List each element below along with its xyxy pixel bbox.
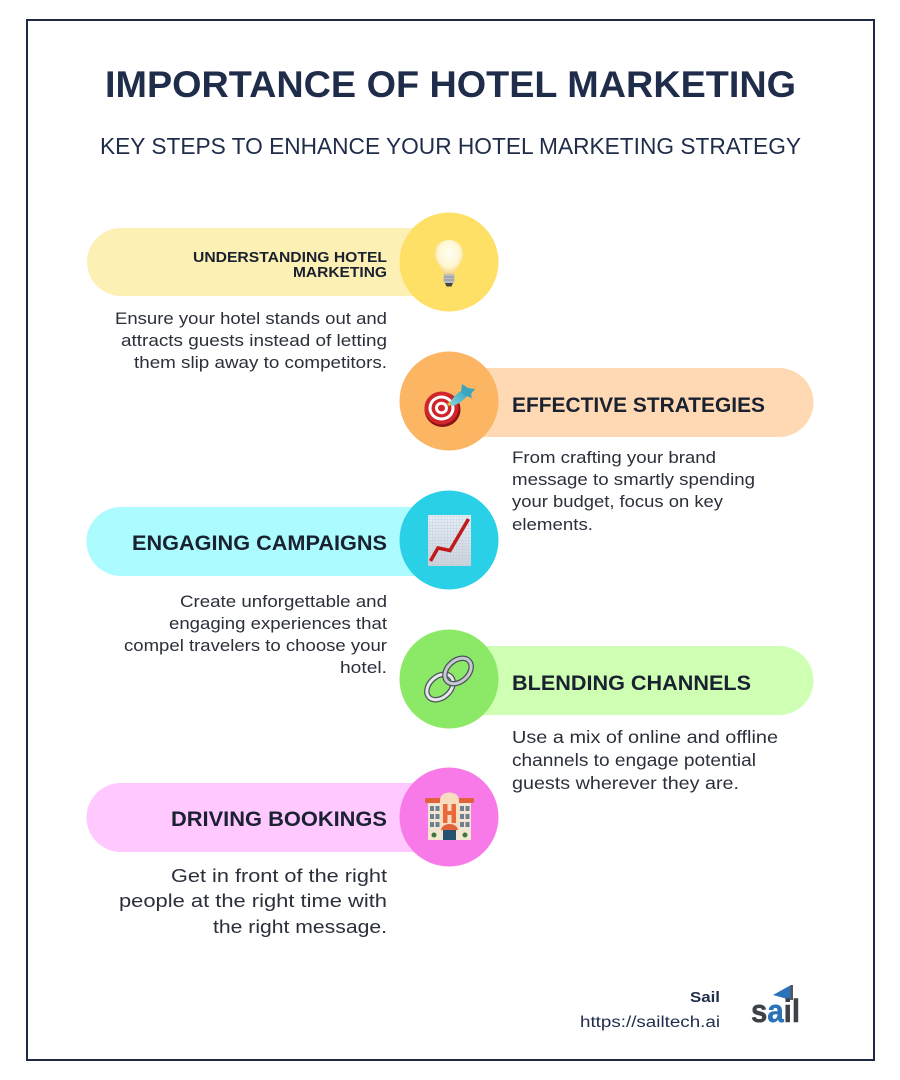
heading: step 4: BLENDING CHANNELS (512, 671, 751, 695)
text: step 5 body: the right message. (213, 916, 387, 937)
text: step 2 body: elements. (512, 516, 593, 534)
text: step 5 body: people at the right time with (119, 890, 387, 911)
panel: driving bookings (87, 768, 499, 937)
text: step 1 body: attracts guests instead of letting (121, 332, 387, 350)
circle: step 2 (400, 352, 498, 450)
text: step 2 body: message to smartly spending (512, 471, 755, 489)
pill: step 2 (460, 368, 814, 437)
footer: brand name and url: Sail (690, 990, 720, 1006)
icon: dart target (424, 384, 475, 427)
text: step 1 body: them slip away to competitors. (134, 354, 387, 372)
logo: sail: sail (751, 993, 800, 1029)
pill: step 5 (87, 783, 440, 852)
subtitle: KEY STEPS TO ENHANCE YOUR HOTEL MARKETING STRATEGY (100, 133, 801, 159)
text: step 5 body (119, 865, 387, 937)
title: IMPORTANCE OF HOTEL MARKETING (105, 64, 796, 105)
footer: brand name and url (580, 990, 720, 1031)
circle: step 5 (400, 768, 498, 866)
heading: step 1: MARKETING (293, 265, 387, 281)
circle: step 4 (400, 630, 498, 728)
heading: step 1 (193, 250, 387, 281)
circle: step 1 (400, 212, 498, 312)
text: step 3 body: hotel. (340, 659, 387, 677)
heading: step 5: DRIVING BOOKINGS (171, 807, 387, 831)
text: step 4 body: Use a mix of online and offline (512, 727, 778, 747)
footer: brand name and url: https://sailtech.ai (580, 1014, 720, 1031)
text: step 3 body: compel travelers to choose your (124, 637, 388, 655)
icon: chain links (422, 653, 476, 705)
panel: blending channels (400, 630, 814, 793)
text: step 5 body: Get in front of the right (171, 865, 387, 886)
text: step 2 body: your budget, focus on key (512, 493, 724, 511)
icon: light bulb (435, 240, 463, 286)
text: step 1 body: Ensure your hotel stands out and (115, 310, 387, 328)
circle: step 3 (400, 490, 498, 590)
panel: understanding hotel marketing (87, 212, 499, 372)
text: step 3 body (124, 593, 388, 677)
heading: step 1: UNDERSTANDING HOTEL (193, 250, 387, 266)
text: step 2 body: From crafting your brand (512, 449, 716, 467)
text: step 2 body (512, 449, 755, 534)
panel: effective strategies (400, 352, 814, 534)
pill: step 3 (87, 507, 440, 576)
text: step 4 body (512, 727, 778, 793)
text: step 3 body: engaging experiences that (169, 615, 387, 633)
icon: hotel building (425, 792, 474, 840)
text: step 4 body: guests wherever they are. (512, 773, 739, 793)
text: step 4 body: channels to engage potential (512, 750, 756, 770)
text: step 1 body (115, 310, 387, 372)
pill: step 4 (460, 646, 814, 715)
text: step 3 body: Create unforgettable and (180, 593, 387, 611)
heading: step 3: ENGAGING CAMPAIGNS (132, 531, 387, 555)
heading: step 2: EFFECTIVE STRATEGIES (512, 393, 765, 417)
panel: engaging campaigns (87, 490, 499, 677)
pill: step 1 (87, 228, 440, 296)
icon: rising chart (428, 515, 471, 566)
